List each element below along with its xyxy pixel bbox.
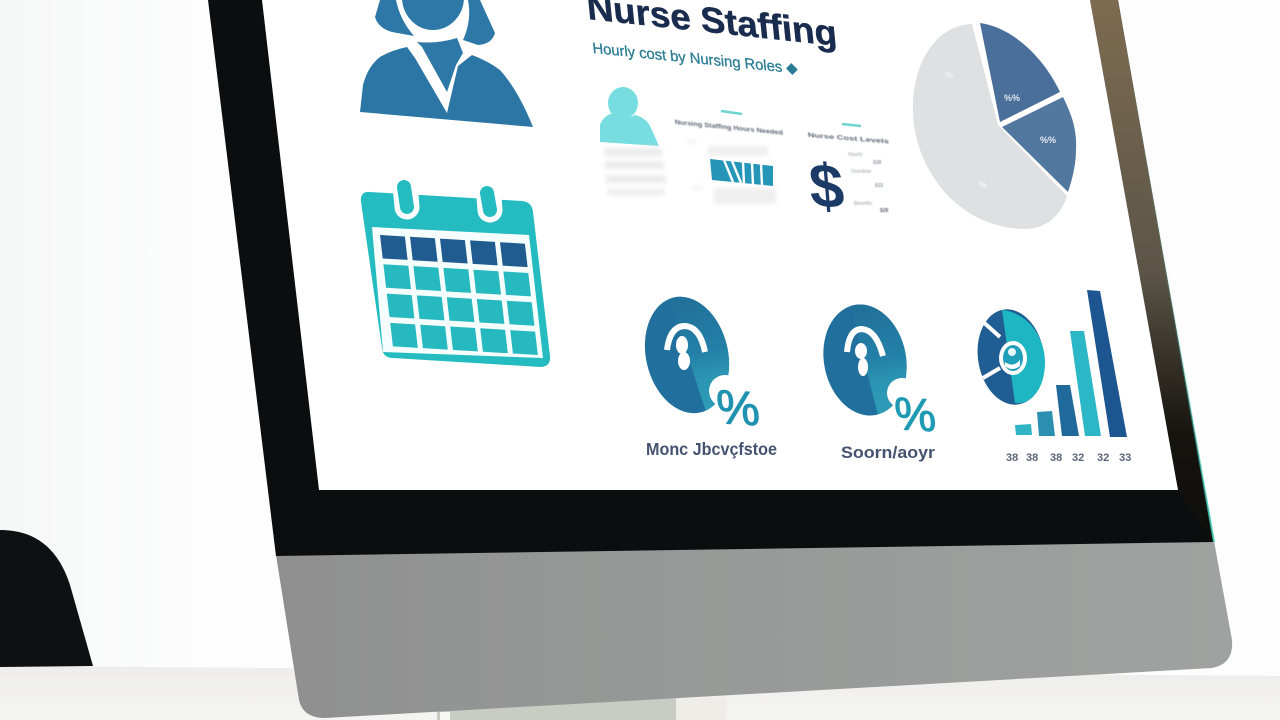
panel heading: Nurse Cost Levels	[808, 132, 890, 146]
axis labels	[1006, 452, 1131, 464]
dark object at left	[0, 530, 93, 667]
axis labels: 38	[1006, 452, 1018, 464]
disc	[823, 304, 907, 416]
axis labels: 32	[1072, 452, 1084, 464]
highlighted bars	[710, 159, 773, 186]
pie chart	[913, 23, 1076, 229]
panel: staffing bar table	[675, 111, 783, 204]
calendar rings	[404, 185, 490, 210]
pie slice: blue upper	[980, 23, 1060, 122]
accent line	[842, 124, 861, 126]
icon: dollar sign: $	[807, 151, 847, 223]
label: Monc Jbcvçfstoe	[646, 439, 777, 459]
pie slice: blue lower	[1002, 97, 1076, 192]
pie slice: largest grey	[913, 24, 1067, 229]
notch	[709, 375, 741, 407]
pie chart: %%	[1004, 93, 1020, 103]
blurred table cells	[686, 140, 776, 204]
small cost labels: $32	[875, 183, 884, 189]
screen	[262, 0, 1178, 490]
pie chart: %	[945, 70, 953, 80]
panel: staffing cost	[807, 124, 890, 223]
percent sign: %	[715, 380, 762, 437]
monitor chin	[276, 541, 1232, 718]
percent sign: %	[893, 387, 938, 441]
small cost labels: Hourly	[848, 152, 863, 158]
subtitle: Hourly cost by Nursing Roles ◆	[592, 40, 799, 78]
nurse glyph	[847, 329, 883, 376]
small cost labels: $38	[873, 160, 882, 166]
donut chart	[971, 304, 1051, 410]
monitor bezel	[208, 0, 1215, 556]
bars	[1015, 290, 1127, 437]
axis labels: 38	[1026, 452, 1038, 464]
donut and bar chart	[971, 290, 1131, 464]
blurred table	[604, 148, 666, 196]
panel: nurse headcount	[600, 87, 666, 196]
panel heading: Nursing Staffing Hours Needed	[675, 119, 783, 137]
metric: staffing percentage one	[644, 296, 776, 458]
axis labels: 33	[1119, 452, 1131, 464]
desk surface	[0, 666, 1280, 720]
small cost labels	[848, 152, 889, 214]
accent line	[721, 111, 742, 114]
calendar day grid	[380, 235, 538, 355]
metric: staffing percentage two	[823, 304, 936, 462]
small cost labels: Overtime	[851, 169, 872, 175]
small cost labels: $28	[880, 208, 889, 214]
icon: nurse person	[360, 0, 533, 127]
icon: calendar	[361, 185, 550, 367]
icon: teal person	[600, 87, 659, 146]
pie chart: %	[979, 180, 987, 190]
label: Soorn/aoyr	[841, 443, 935, 462]
axis labels: 38	[1050, 452, 1062, 464]
notch	[887, 378, 917, 408]
pie chart: %%	[1040, 135, 1056, 145]
disc	[644, 296, 730, 414]
nurse glyph	[667, 326, 705, 370]
small cost labels: Benefits	[854, 201, 873, 207]
axis labels: 32	[1097, 452, 1109, 464]
monitor stand	[437, 695, 726, 720]
